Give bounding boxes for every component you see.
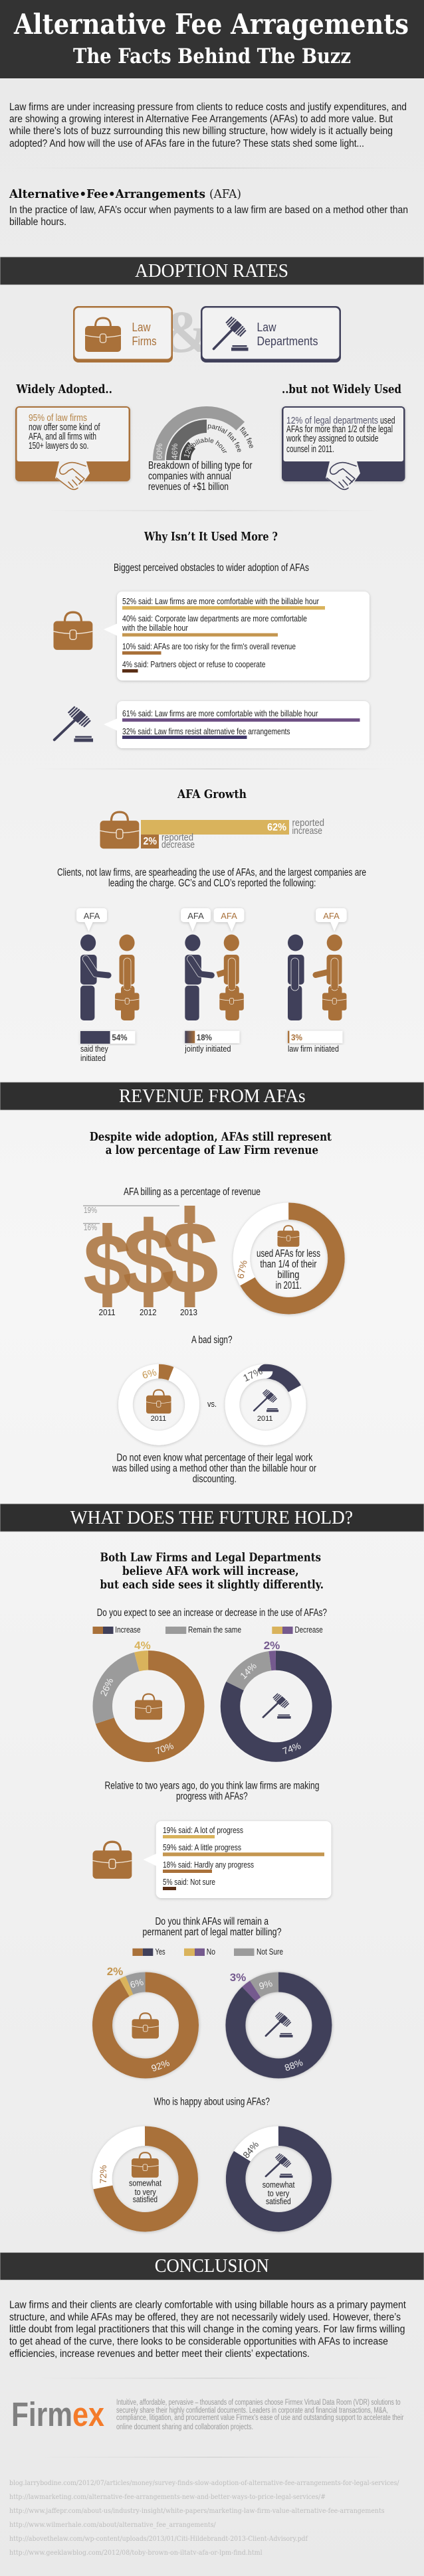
chart: dollar signs by year: 2011 <box>98 1307 116 1317</box>
donut chart: law firms 6%: 2011 <box>151 1415 166 1423</box>
text: do not even know: was billed using a method other than the billable hour or <box>112 1463 316 1475</box>
bar chart: billing type arcs <box>153 406 253 461</box>
bar chart: afa growth <box>100 812 324 850</box>
sources list: http://www.geeklawblog.com/2012/08/toby-brown-on-iltatv-afa-or-lpm-find.html <box>9 2549 263 2557</box>
intro text: while there's lots of buzz surrounding this new billing structure, how widely is it actually being <box>9 125 393 137</box>
conclusion text: to get ahead of the curve, there looks to be considerable opportunities with AFAs to increase <box>9 2336 388 2348</box>
bar chart: afa growth: increase <box>292 826 322 837</box>
panel: widely adopted box: 150+ lawyers do so. <box>29 441 89 451</box>
definition: alternative fee arrangements: (AFA) <box>209 187 241 201</box>
chart: dollar signs by year: $ <box>83 1216 132 1313</box>
icon: briefcase law firms <box>53 612 92 650</box>
bar chart: billing type arcs: 60% <box>155 443 164 459</box>
card: law departments: Law <box>257 321 276 334</box>
sources list <box>9 2480 399 2557</box>
panel: not widely used box: work they assigned to outside <box>286 434 379 444</box>
donut chart: law departments satisfied: to very <box>268 2188 290 2198</box>
intro text: adopted? And how will the use of AFAs fare in the future? These stats shed some light... <box>9 138 364 149</box>
donut chart: law firms expectation: 4% <box>134 1639 151 1652</box>
callout: progress responses: 59% said: A little progress <box>163 1842 241 1852</box>
donut chart: law firms permanent <box>102 1965 189 2073</box>
bar chart: billing type arcs: 12% <box>183 442 195 459</box>
subheading: a bad sign: A bad sign? <box>191 1334 233 1346</box>
section band: revenue from afas <box>0 1082 424 1110</box>
legend: yes no not sure: No <box>207 1947 215 1957</box>
donut chart: law departments expectation: 74% <box>281 1740 302 1757</box>
pictogram: law firm initiated: 3% <box>291 1032 302 1042</box>
bar chart: afa growth: 2% <box>144 836 157 847</box>
pictogram: said they initiated <box>76 908 140 1063</box>
pictogram: said they initiated: 54% <box>112 1032 128 1042</box>
icon: briefcase progress <box>93 1842 132 1879</box>
callout: progress responses <box>144 1821 331 1898</box>
donut chart: 67% under a quarter: in 2011. <box>276 1280 302 1291</box>
label: versus: vs. <box>207 1399 217 1409</box>
legend: increase remain decrease: Remain the same <box>188 1625 241 1635</box>
donut chart: law firms expectation <box>98 1639 195 1757</box>
donut chart: law departments satisfied <box>236 2136 322 2222</box>
heading: why isn't it used more: Why Isn’t It Used More ? <box>144 530 278 544</box>
sources list: http://www.jaffepr.com/about-us/industry-insight/white-papers/marketing-law-firm-value-alternative-fee-arrangements <box>9 2508 385 2515</box>
question: increase or decrease: Do you expect to see an increase or decrease in the use of AFAs? <box>97 1607 327 1619</box>
panel: not widely used box: used <box>380 416 395 426</box>
callout: progress responses: 18% said: Hardly any progress <box>163 1860 254 1870</box>
donut chart: law departments 17%: 2011 <box>257 1415 273 1423</box>
pictogram: jointly initiated: 18% <box>197 1032 212 1042</box>
question: permanent part of billing <box>142 1916 282 1938</box>
heading: low percentage of revenue <box>90 1130 332 1157</box>
heading: low percentage of revenue: Despite wide adoption, AFAs still represent <box>90 1130 332 1144</box>
sources list: http://abovethelaw.com/wp-content/uploads/2013/01/Citi-Hildebrandt-2013-Client-Advisory.pdf <box>9 2536 308 2543</box>
card: law departments: Departments <box>257 335 318 348</box>
donut chart: law firms expectation: 26% <box>98 1676 116 1698</box>
legend: yes no not sure: Not Sure <box>257 1947 283 1957</box>
chart: dollar signs by year: 2012 <box>140 1307 157 1317</box>
legend: increase remain decrease <box>93 1625 323 1635</box>
callout: law department obstacles: 61% said: Law firms are more comfortable with the billable hour <box>122 708 318 718</box>
conclusion text <box>9 2300 406 2360</box>
pictogram: jointly initiated: AFA <box>187 911 204 921</box>
chart title: afa billing: AFA billing as a percentage of revenue <box>124 1186 261 1198</box>
panel: not widely used box <box>282 406 405 489</box>
legend: increase remain decrease: Increase <box>115 1625 141 1635</box>
donut chart: law firms 6%: 6% <box>141 1367 158 1382</box>
bar chart: billing type arcs: flat fee <box>239 427 253 448</box>
callout: law firm obstacles <box>104 592 370 681</box>
pictogram: jointly initiated: jointly initiated <box>184 1044 231 1054</box>
callout: law firm obstacles: 52% said: Law firms are more comfortable with the billable hour <box>122 596 320 606</box>
logo: firmex: Firm <box>11 2395 72 2433</box>
bar chart: billing type arcs: 46% <box>170 443 179 459</box>
title header <box>0 0 424 78</box>
logo: firmex: ex <box>72 2395 104 2433</box>
bar chart: afa growth: 62% <box>267 822 286 833</box>
sources list: blog.larrybodine.com/2012/07/articles/money/survey-finds-slow-adoption-of-alternative-fee-arrangements-for-legal-services/ <box>9 2480 399 2487</box>
ampersand: & <box>162 299 211 365</box>
chart: dollar signs by year: $ <box>161 1200 219 1315</box>
question: permanent part of billing: Do you think AFAs will remain a <box>156 1916 268 1927</box>
donut chart: law departments satisfied: 84% <box>241 2139 261 2160</box>
pictogram: law firm initiated: law firm initiated <box>288 1044 339 1054</box>
panel: not widely used box: 12% of legal departments <box>286 416 378 426</box>
panel: not widely used box: counsel in 2011. <box>286 444 334 455</box>
donut chart: 67% under a quarter: 67% <box>235 1259 249 1279</box>
donut chart: law firms satisfied: to very <box>135 2187 156 2197</box>
callout: law firm obstacles: 4% said: Partners object or refuse to cooperate <box>122 659 266 669</box>
panel: widely adopted box: 95% of law firms <box>29 413 87 424</box>
icon: briefcase in donut <box>278 1226 299 1247</box>
bar chart: afa growth: reported <box>292 818 324 829</box>
definition: alternative fee arrangements: billable hours. <box>9 216 66 228</box>
card: law firms: Law <box>132 321 151 334</box>
section band: what does the future hold: WHAT DOES THE FUTURE HOLD? <box>70 1508 353 1528</box>
legend: yes no not sure <box>132 1947 283 1957</box>
sources list: http://lawmarketing.com/alternative-fee-arrangements-new-and-better-ways-to-price-legal-services/# <box>9 2494 326 2501</box>
heading: widely adopted: Widely Adopted.. <box>16 382 112 396</box>
chart caption: Breakdown of billing type for <box>148 460 253 471</box>
icon: gavel law departments <box>54 705 93 742</box>
question: progress with afas: progress with AFAs? <box>176 1791 248 1803</box>
heading: low percentage of revenue: a low percentage of Law Firm revenue <box>106 1143 318 1157</box>
panel: widely adopted box <box>15 406 130 489</box>
text: about firmex <box>116 2399 404 2431</box>
heading: both sides: but each side sees it slightly differently. <box>100 1578 324 1592</box>
subheading: obstacles: Biggest perceived obstacles to wider adoption of AFAs <box>114 562 309 574</box>
text: clients spearheading <box>57 867 366 889</box>
pictogram: jointly initiated: AFA <box>221 911 237 921</box>
donut chart: law departments expectation: 14% <box>238 1660 259 1681</box>
callout: progress responses: 19% said: A lot of progress <box>163 1825 243 1835</box>
heading: both sides <box>100 1551 324 1592</box>
callout: law firm obstacles: with the billable hour <box>122 623 189 633</box>
chart caption: companies with annual <box>148 471 231 482</box>
bar chart: billing type arcs: billable hour <box>191 437 227 453</box>
pictogram: said they initiated: said they <box>80 1044 108 1054</box>
donut chart: law departments permanent: 88% <box>283 2057 304 2073</box>
donut chart: law departments permanent: 9% <box>258 1978 274 1992</box>
donut chart: law departments 17%: 17% <box>241 1366 265 1384</box>
pictogram: jointly initiated <box>181 908 245 1054</box>
donut chart: law firms satisfied: 72% <box>98 2165 108 2184</box>
donut chart: law firms satisfied: satisfied <box>133 2194 158 2204</box>
donut chart: law firms permanent: 92% <box>150 2057 171 2073</box>
title header: The Facts Behind The Buzz <box>73 44 351 68</box>
card: law firms <box>73 306 173 362</box>
chart: dollar signs by year <box>83 1200 219 1317</box>
section band: what does the future hold <box>0 1504 424 1532</box>
donut chart: law departments satisfied: satisfied <box>266 2196 291 2206</box>
donut chart: law firms 6% <box>126 1367 192 1438</box>
bar chart: afa growth: decrease <box>161 840 195 850</box>
legend: yes no not sure: Yes <box>156 1947 165 1957</box>
chart: dollar signs by year: 16% <box>84 1222 97 1232</box>
donut chart: law firms satisfied <box>98 2136 188 2222</box>
bar chart: billing type arcs: partial flat fee <box>207 424 241 452</box>
donut chart: law firms expectation: 70% <box>154 1740 175 1757</box>
heading: both sides: believe AFA work will increase, <box>122 1564 299 1578</box>
donut chart: 67% under a quarter: billing <box>277 1269 299 1281</box>
pictogram: said they initiated: initiated <box>80 1053 106 1063</box>
question: who is happy: Who is happy about using AFAs? <box>154 2097 270 2108</box>
pictogram: law firm initiated: AFA <box>323 911 340 921</box>
icon: briefcase growth <box>100 812 139 848</box>
card: law firms: Firms <box>132 335 157 348</box>
section band: adoption rates: ADOPTION RATES <box>135 261 288 282</box>
panel: widely adopted box: AFA, and all firms with <box>29 432 96 442</box>
text: do not even know <box>112 1453 316 1485</box>
donut chart: 67% under a quarter <box>235 1211 336 1306</box>
legend: increase remain decrease: Decrease <box>295 1625 323 1635</box>
text: about firmex: online document sharing and collaboration projects. <box>116 2423 253 2431</box>
definition: alternative fee arrangements: Alternative•Fee•Arrangements <box>9 187 205 201</box>
heading: afa growth: AFA Growth <box>177 787 247 801</box>
section band: conclusion: CONCLUSION <box>155 2256 269 2277</box>
donut chart: law departments permanent <box>230 1971 322 2073</box>
chart: dollar signs by year: 19% <box>84 1205 97 1215</box>
donut chart: law departments 17% <box>232 1366 299 1438</box>
intro text <box>9 102 407 149</box>
section band: conclusion <box>0 2253 424 2280</box>
chart: dollar signs by year: 2013 <box>180 1307 197 1317</box>
card: law departments <box>201 306 341 362</box>
text: do not even know: discounting. <box>193 1474 237 1485</box>
text: clients spearheading: leading the charge. GC’s and CLO’s reported the following: <box>108 878 316 889</box>
callout: law firm obstacles: 10% said: AFAs are too risky for the firm's overall revenue <box>122 641 296 651</box>
donut chart: law firms permanent: 2% <box>107 1965 123 1978</box>
callout: law department obstacles <box>104 701 370 748</box>
section band: adoption rates <box>0 257 424 285</box>
pictogram: law firm initiated <box>288 908 347 1054</box>
icon: handshake brown <box>55 461 90 489</box>
bar chart: afa growth: reported <box>161 833 193 843</box>
question: progress with afas: Relative to two years ago, do you think law firms are making <box>105 1781 319 1792</box>
callout: law firm obstacles: 40% said: Corporate law departments are more comfortable <box>122 613 307 623</box>
sources list: http://www.wilmerhale.com/about/alternative_fee_arrangements/ <box>9 2522 216 2529</box>
donut chart: law departments expectation <box>230 1639 322 1757</box>
donut chart: 67% under a quarter: than 1/4 of their <box>260 1259 316 1270</box>
section band: revenue from afas: REVENUE FROM AFAs <box>119 1086 306 1107</box>
icon: handshake navy <box>326 461 360 489</box>
chart caption <box>148 460 253 493</box>
heading: both sides: Both Law Firms and Legal Departments <box>100 1551 321 1565</box>
donut chart: law firms permanent: 6% <box>129 1976 145 1990</box>
text: do not even know: Do not even know what percentage of their legal work <box>116 1453 313 1464</box>
pictogram: said they initiated: AFA <box>84 911 100 921</box>
definition: alternative fee arrangements <box>9 187 408 228</box>
callout: progress responses: 5% said: Not sure <box>163 1877 215 1887</box>
conclusion text: efficiencies, increase revenues and better meet their clients’ expectations. <box>9 2348 310 2360</box>
donut chart: law departments satisfied: somewhat <box>263 2180 295 2190</box>
donut chart: law departments expectation: 2% <box>264 1639 280 1652</box>
panel: widely adopted box: now offer some kind of <box>29 422 100 433</box>
question: progress with afas <box>105 1781 319 1803</box>
donut chart: 67% under a quarter: used AFAs for less <box>257 1248 320 1259</box>
question: permanent part of billing: permanent part of legal matter billing? <box>142 1927 282 1938</box>
callout: law department obstacles: 32% said: Law firms resist alternative fee arrangements <box>122 726 290 736</box>
donut chart: law firms satisfied: somewhat <box>129 2178 161 2188</box>
donut chart: law departments permanent: 3% <box>230 1971 246 1984</box>
chart: dollar signs by year: $ <box>123 1209 174 1313</box>
chart caption: revenues of +$1 billion <box>148 481 229 493</box>
heading: but not widely used: ..but not Widely Used <box>282 382 401 396</box>
